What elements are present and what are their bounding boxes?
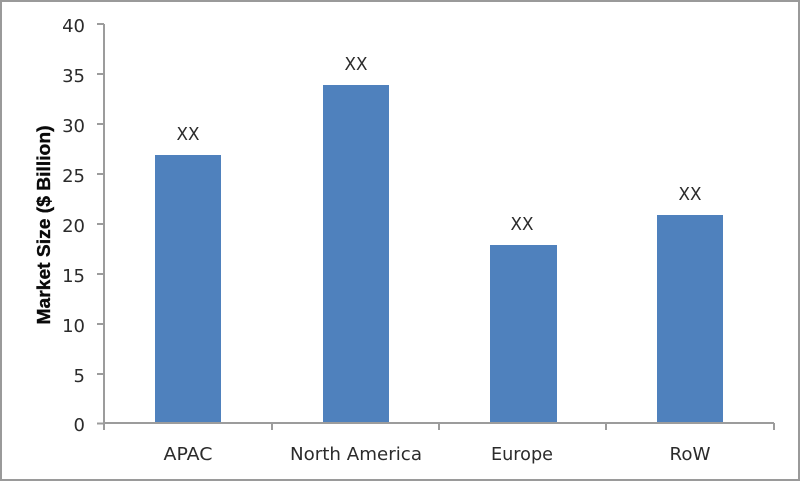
x axis [104, 423, 774, 430]
category labels: Europe [491, 444, 553, 465]
bar value labels: XX [678, 184, 702, 205]
category labels: APAC [164, 444, 212, 465]
y axis tick labels: 15 [62, 266, 85, 287]
bar value labels: XX [344, 54, 368, 75]
y axis tick labels: 25 [62, 166, 85, 187]
bar: APAC [155, 155, 221, 423]
y axis tick labels: 10 [62, 316, 85, 337]
y axis [62, 16, 104, 436]
y axis tick labels: 35 [62, 66, 85, 87]
y axis tick labels: 0 [74, 415, 85, 436]
category labels: North America [290, 444, 422, 465]
bars [155, 85, 723, 423]
y axis title: Market Size ($ Billion) [34, 126, 54, 324]
y axis tick labels: 20 [62, 216, 85, 237]
bar: RoW [657, 215, 723, 423]
bar value labels: XX [176, 124, 200, 145]
y axis tick labels [62, 16, 85, 436]
category labels: RoW [670, 444, 711, 465]
bar value labels: XX [510, 214, 534, 235]
bar value labels [176, 54, 702, 235]
category labels [164, 444, 711, 465]
y axis tick labels: 5 [74, 366, 85, 387]
y axis tick labels: 30 [62, 116, 85, 137]
bar: North America [323, 85, 389, 423]
bar: Europe [490, 245, 557, 423]
y axis tick labels: 40 [62, 16, 85, 37]
